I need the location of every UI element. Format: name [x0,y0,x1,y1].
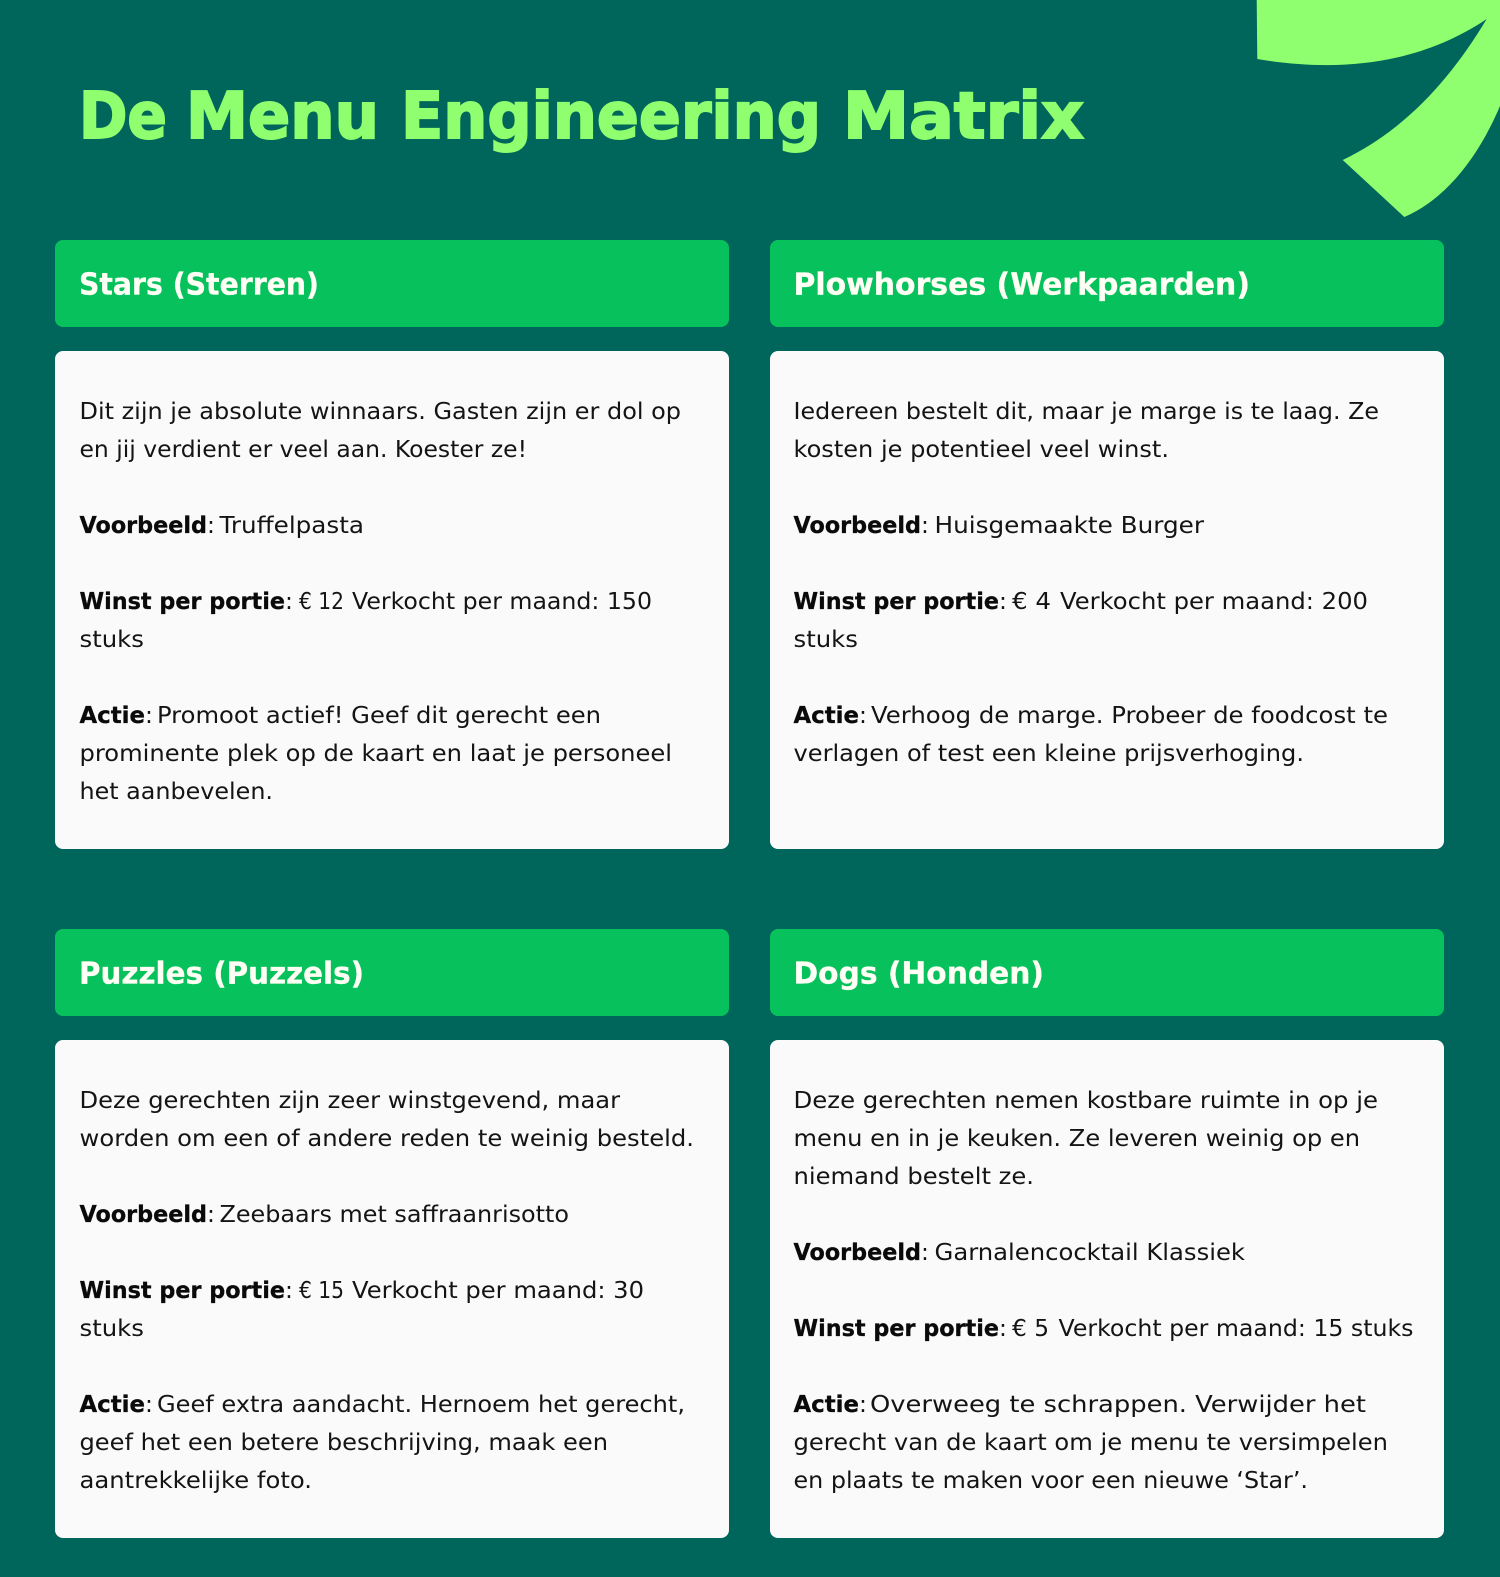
text card: Stars: Winst per portie [80,587,285,615]
text card: Dogs: Actie [794,1390,859,1418]
text card: Plowhorses [770,351,1444,849]
panel: Dogs [770,929,1444,1538]
text card: Stars: stuks [80,625,144,653]
heading: Puzzles [55,929,729,1016]
text card: Puzzles [55,1040,729,1538]
text card: Stars: € 12 [299,587,344,615]
text card: Dogs: Voorbeeld [794,1238,921,1266]
heading: Stars [55,240,729,327]
text card: Puzzles: : [285,1276,293,1304]
text card: Puzzles: Zeebaars met saffraanrisotto [220,1200,569,1228]
text card: Stars: en jij verdient er veel aan. Koester ze! [80,435,527,463]
text card: Stars [55,351,729,849]
text card: Stars: Voorbeeld [80,511,207,539]
text card: Plowhorses: verlagen of test een kleine prijsverhoging. [794,739,1304,767]
heading: Plowhorses: Plowhorses (Werkpaarden) [794,268,1250,302]
text card: Dogs: menu en in je keuken. Ze leveren weinig op en [794,1124,1360,1152]
text card: Plowhorses: Verkocht per maand: 200 [1060,587,1368,615]
text card: Stars: : [145,701,153,729]
title: De [79,80,167,154]
text card: Puzzles: Actie [80,1390,145,1418]
text card: Puzzles: geef het een betere beschrijving, maak een [80,1428,608,1456]
heading: Dogs: Dogs (Honden) [794,956,1044,992]
text card: Dogs: en plaats te maken voor een nieuwe ‘Star’. [794,1466,1308,1494]
text card: Plowhorses: : [859,701,867,729]
text card: Dogs: € 5 [1012,1314,1049,1342]
text card: Stars: Verkocht per maand: 150 [352,587,652,615]
text card: Stars: : [285,587,293,615]
heading: Stars: Stars (Sterren) [79,268,319,302]
title: Engineering [401,80,821,154]
text card: Plowhorses: Voorbeeld [794,511,921,539]
text card: Puzzles: : [207,1200,215,1228]
panel: Plowhorses [770,240,1444,849]
text card: Stars: Promoot actief! Geef dit gerecht een [157,701,601,729]
decorative corner shape [1257,0,1500,217]
text card: Plowhorses: € 4 [1012,587,1051,615]
text card: Plowhorses: Actie [794,701,859,729]
text card: Plowhorses: Iedereen bestelt dit, maar je marge is te laag. Ze [794,397,1379,425]
heading: Plowhorses [770,240,1444,327]
text card: Stars: Dit zijn je absolute winnaars. Gasten zijn er dol op [80,397,681,425]
text card: Puzzles: stuks [80,1314,144,1342]
text card: Puzzles: Geef extra aandacht. Hernoem het gerecht, [157,1390,685,1418]
text card: Dogs: Verkocht per maand: 15 stuks [1058,1314,1414,1342]
text card: Dogs: : [859,1390,867,1418]
text card: Puzzles: Voorbeeld [80,1200,207,1228]
text card: Plowhorses: Winst per portie [794,587,999,615]
text card: Dogs: niemand bestelt ze. [794,1162,1034,1190]
text card: Puzzles: : [145,1390,153,1418]
title [79,80,1084,154]
text card: Puzzles: Deze gerechten zijn zeer winstgevend, maar [80,1086,620,1114]
text card: Puzzles: worden om een of andere reden te weinig besteld. [80,1124,694,1152]
text card: Plowhorses: stuks [794,625,858,653]
text card: Dogs: Garnalencocktail Klassiek [934,1238,1245,1266]
text card: Puzzles: Winst per portie [80,1276,285,1304]
text card: Dogs: : [999,1314,1007,1342]
panel: Puzzles [55,929,729,1538]
text card: Plowhorses: kosten je potentieel veel winst. [794,435,1169,463]
title: Menu [186,80,379,154]
text card: Puzzles: € 15 [299,1276,344,1304]
text card: Stars: Truffelpasta [218,511,364,539]
text card: Plowhorses: : [921,511,929,539]
text card: Dogs: Overweeg te schrappen. Verwijder het [870,1390,1366,1418]
text card: Dogs: gerecht van de kaart om je menu te versimpelen [794,1428,1388,1456]
heading: Dogs [770,929,1444,1016]
text card: Stars: prominente plek op de kaart en laat je personeel [80,739,672,767]
text card: Plowhorses: Huisgemaakte Burger [934,511,1204,539]
text card: Stars: Actie [80,701,145,729]
text card: Dogs: Deze gerechten nemen kostbare ruimte in op je [794,1086,1378,1114]
panel: Stars [55,240,729,849]
text card: Dogs: Winst per portie [794,1314,999,1342]
text card: Puzzles: Verkocht per maand: 30 [352,1276,644,1304]
text card: Puzzles: aantrekkelijke foto. [80,1466,312,1494]
title: Matrix [843,80,1084,154]
text card: Stars: : [207,511,215,539]
text card: Stars: het aanbevelen. [80,777,273,805]
text card: Plowhorses: Verhoog de marge. Probeer de foodcost te [871,701,1388,729]
text card: Plowhorses: : [999,587,1007,615]
text card: Dogs [770,1040,1444,1538]
heading: Puzzles: Puzzles (Puzzels) [79,956,364,992]
text card: Dogs: : [921,1238,929,1266]
